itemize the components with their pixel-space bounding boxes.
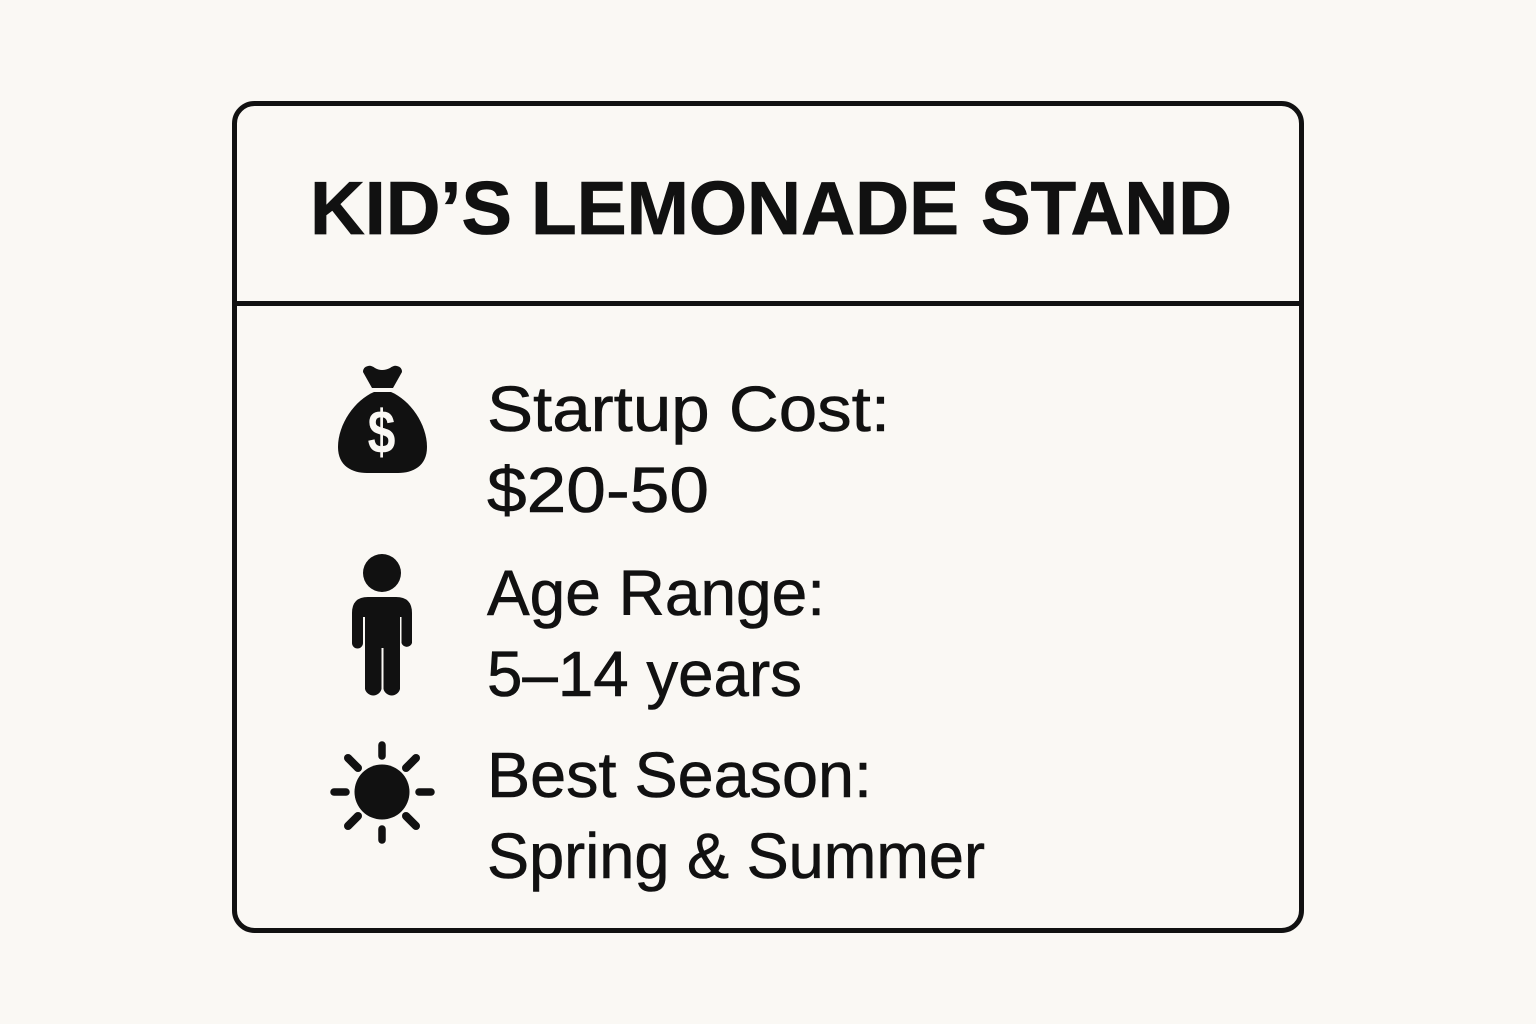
panel: lemonade stand card [234,104,1302,930]
text: startup cost [487,373,890,526]
title: LEMONADE [531,166,959,250]
text: age range: 5–14 years [487,638,802,710]
icon: money bag [338,366,427,473]
title: KID’S [310,166,512,250]
icon: child figure [352,554,412,695]
text: best season [487,739,985,892]
text: best season: Spring & Summer [487,820,985,892]
icon: sun [334,745,431,840]
title: STAND [981,166,1232,250]
text: startup cost: $20-50 [487,454,709,526]
title [310,166,1232,250]
text: startup cost: Startup Cost: [487,373,890,445]
text: age range: Age Range: [487,557,825,629]
text: best season: Best Season: [487,739,872,811]
text: age range [487,557,825,710]
icon: money bag: $ [368,398,395,466]
